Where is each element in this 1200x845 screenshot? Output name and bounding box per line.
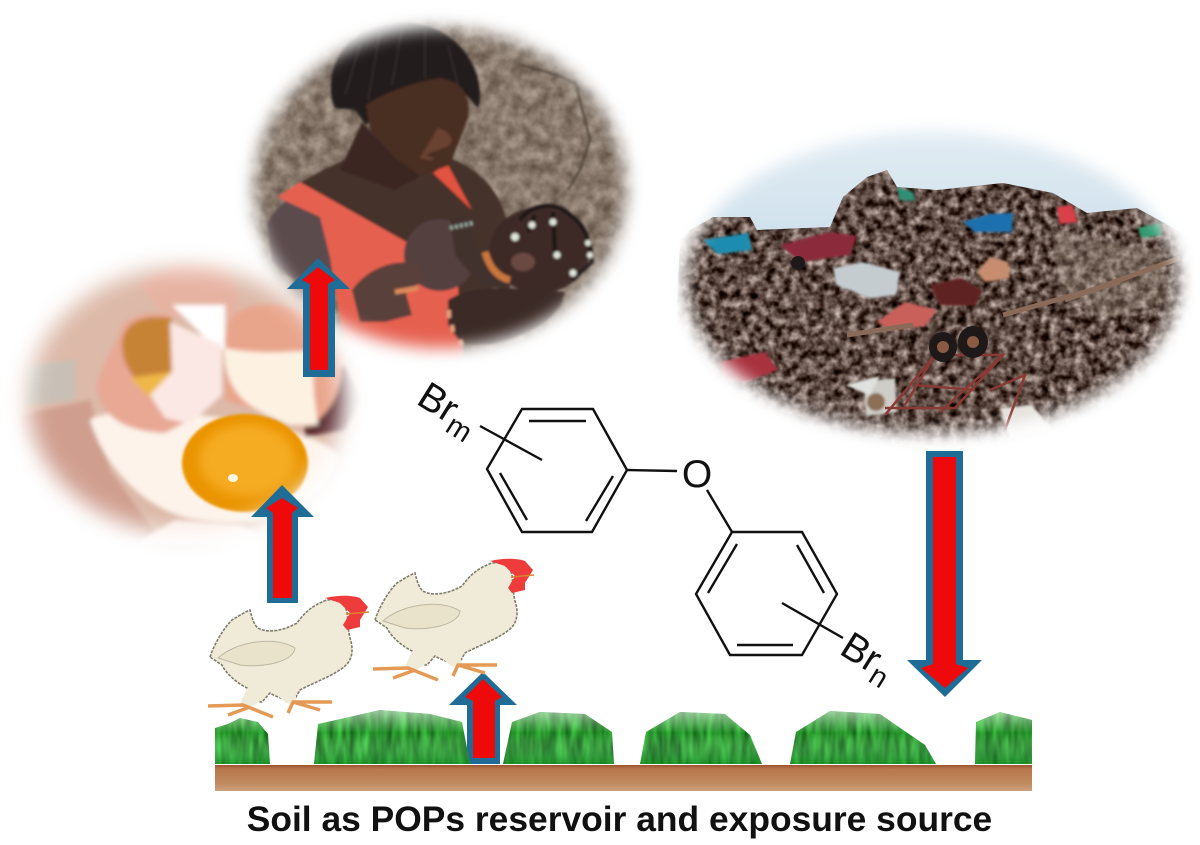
woman's left hand	[352, 262, 424, 322]
red metal lattice	[885, 355, 1025, 430]
hair	[331, 22, 480, 125]
red dress	[277, 182, 463, 360]
chemical structure: polybrominated diphenyl ether	[407, 374, 903, 695]
wheel left hub	[937, 341, 949, 353]
right shell white	[224, 348, 318, 425]
right shell pink	[225, 304, 341, 427]
yolk	[182, 414, 308, 512]
woman's right hand and forearm	[448, 288, 565, 345]
grass clumps	[215, 705, 1032, 767]
arrow: up to egg	[251, 485, 314, 603]
coloured scrap pieces	[703, 233, 752, 254]
grey counter patch	[25, 360, 75, 405]
left shell outer	[97, 313, 190, 433]
wheel right	[958, 326, 988, 358]
grass texture	[215, 705, 1032, 767]
white crack gap	[172, 305, 225, 350]
wheel right hub	[967, 336, 979, 348]
heap of scrap	[678, 170, 1191, 445]
yolk centre glow	[199, 424, 295, 496]
wheel left	[929, 332, 957, 362]
hand nails	[395, 288, 418, 292]
neck	[340, 122, 420, 190]
chicken right	[373, 559, 534, 680]
photo: mother breastfeeding child	[242, 16, 638, 360]
milky egg white	[90, 412, 340, 522]
label: Br n: n	[863, 659, 894, 695]
chest and right shoulder	[301, 158, 508, 296]
caption: Soil as POPs reservoir and exposure source	[247, 799, 992, 839]
baby beads	[511, 218, 593, 276]
arrow: up to mother	[287, 258, 350, 377]
dark gap behind shells	[303, 365, 362, 437]
ground: grass and soil	[215, 705, 1032, 791]
breast	[404, 219, 476, 291]
soil band	[215, 765, 1032, 791]
label: Br m: m	[440, 409, 478, 449]
bottom shell piece	[135, 520, 290, 550]
long planks	[847, 258, 1180, 335]
sky	[696, 128, 1166, 230]
small tyre	[791, 256, 805, 270]
hair braids highlights	[345, 28, 458, 100]
mud wall	[242, 16, 638, 358]
label: Br n: Br	[833, 624, 889, 681]
left shell white inside	[150, 322, 222, 424]
nose and lips	[420, 128, 452, 160]
baby mouth	[511, 253, 535, 271]
fingers nails	[449, 310, 462, 345]
dress strap	[433, 163, 472, 210]
bonds and rings	[480, 409, 843, 655]
label: oxygen: O	[682, 453, 712, 496]
counter surface	[15, 254, 353, 533]
face	[366, 78, 468, 176]
left shoulder and arm	[267, 194, 335, 285]
left shell interior	[122, 317, 172, 382]
scrap texture	[678, 170, 1191, 445]
yolk highlight	[228, 474, 238, 482]
wall cracks	[520, 65, 590, 190]
photo: scrap metal heap	[678, 128, 1191, 445]
baby arm	[450, 215, 510, 290]
bracelet	[450, 223, 473, 228]
arrow: scrap down to soil	[907, 451, 982, 697]
label: Br m: Br	[410, 374, 466, 431]
baby braids	[520, 206, 592, 280]
baby finger	[485, 252, 510, 280]
photo: cracked egg	[15, 254, 359, 540]
grass tips fade	[215, 705, 1032, 767]
arrow: soil up to chicken	[449, 672, 517, 764]
top shell fragment	[140, 262, 240, 325]
baby head	[490, 207, 590, 293]
chicken left	[208, 596, 369, 717]
left shell yolk residue	[130, 372, 180, 400]
lower pink counter	[20, 400, 160, 540]
